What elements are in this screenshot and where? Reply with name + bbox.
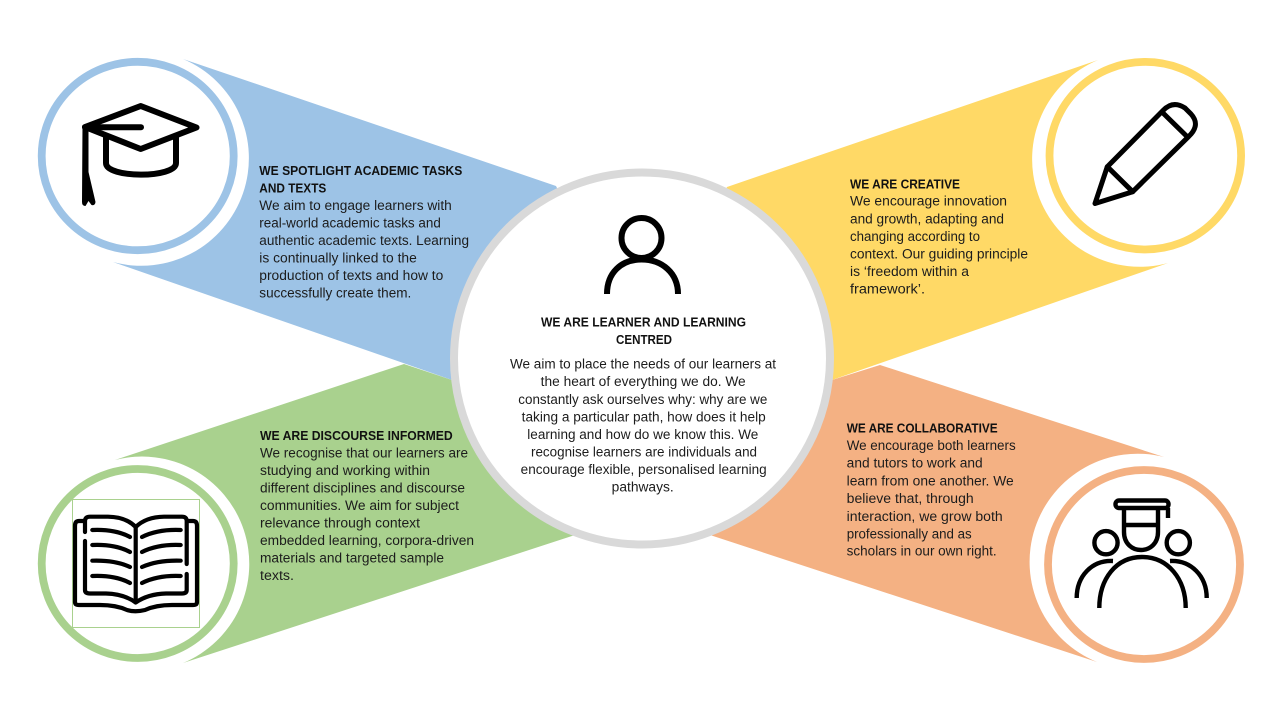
blue icon badge: [42, 62, 234, 250]
central heading: CENTRED: [616, 332, 672, 347]
icon: graduation cap: [82, 106, 196, 206]
text block: collaborative: and tutors to work and: [847, 456, 983, 471]
central text block: the heart of everything we do. We: [541, 374, 746, 389]
text block: discourse informed: studying and working within: [260, 463, 430, 478]
text block: academic tasks: AND TEXTS: [259, 180, 326, 196]
text block: discourse informed: We recognise that our learners are: [260, 446, 468, 460]
text block: discourse informed: embedded learning, corpora-driven: [260, 533, 474, 548]
icon: pencil: [1095, 105, 1195, 204]
text block: discourse informed: materials and targeted sample: [260, 551, 444, 566]
text block: creative: context. Our guiding principle: [850, 246, 1028, 261]
text block: academic tasks: We aim to engage learners with: [259, 198, 452, 213]
text block: discourse informed: relevance through context: [260, 516, 420, 531]
text block: discourse informed: [260, 428, 474, 583]
orange icon badge: [1048, 470, 1240, 659]
text block: academic tasks: is continually linked to the: [259, 251, 417, 266]
icon: open book: [75, 517, 197, 611]
text block: collaborative: We encourage both learners: [847, 438, 1016, 453]
text block: creative: is ‘freedom within a: [850, 264, 970, 279]
icon: learner: [607, 218, 678, 294]
text block: creative: changing according to: [850, 229, 980, 244]
text block: collaborative: WE ARE COLLABORATIVE: [847, 421, 998, 436]
icon: group with graduate: [1077, 500, 1207, 608]
central heading: WE ARE LEARNER AND LEARNING: [541, 315, 746, 330]
text block: collaborative: learn from one another. We: [847, 474, 1014, 489]
text block: creative: and growth, adapting and: [850, 211, 1004, 226]
text block: creative: [850, 176, 1028, 296]
green icon badge: [42, 469, 234, 658]
text block: collaborative: scholars in our own right.: [847, 544, 997, 559]
text block: collaborative: professionally and as: [847, 526, 972, 541]
central heading: [541, 315, 746, 347]
text block: academic tasks: WE SPOTLIGHT ACADEMIC TASKS: [259, 163, 462, 178]
text block: creative: framework’.: [850, 281, 925, 296]
central text block: learning and how do we know this. We: [527, 427, 758, 442]
text block: creative: WE ARE CREATIVE: [850, 176, 960, 191]
text block: academic tasks: successfully create them.: [259, 286, 411, 301]
panel: green discourse band: [115, 358, 642, 663]
text block: academic tasks: authentic academic texts. Learning: [259, 233, 469, 248]
panel: blue academic tasks band: [113, 59, 642, 380]
text block: collaborative: believe that, through: [847, 491, 974, 506]
text block: academic tasks: production of texts and how to: [259, 268, 443, 283]
central text block: pathways.: [612, 480, 674, 495]
central text block: recognise learners are individuals and: [531, 445, 757, 460]
central text block: [510, 356, 776, 495]
text block: discourse informed: texts.: [260, 568, 294, 583]
panel: yellow creative band: [642, 60, 1168, 380]
central text block: encourage flexible, personalised learning: [521, 462, 767, 477]
text block: academic tasks: real-world academic tasks and: [259, 216, 441, 231]
central text block: taking a particular path, how does it help: [522, 410, 766, 425]
text block: collaborative: interaction, we grow both: [847, 509, 1003, 524]
yellow icon badge: [1050, 62, 1241, 250]
text block: discourse informed: communities. We aim for subject: [260, 498, 459, 513]
text block: discourse informed: WE ARE DISCOURSE INFORMED: [260, 428, 453, 443]
text block: creative: We encourage innovation: [850, 194, 1007, 209]
central text block: constantly ask ourselves why: why are we: [518, 392, 767, 407]
central circle: [454, 172, 830, 544]
panel: orange collaborative band: [642, 358, 1164, 662]
text block: collaborative: [847, 421, 1016, 559]
text block: academic tasks: [259, 163, 469, 301]
text block: discourse informed: different disciplines and discourse: [260, 481, 465, 496]
central text block: We aim to place the needs of our learners at: [510, 356, 776, 371]
